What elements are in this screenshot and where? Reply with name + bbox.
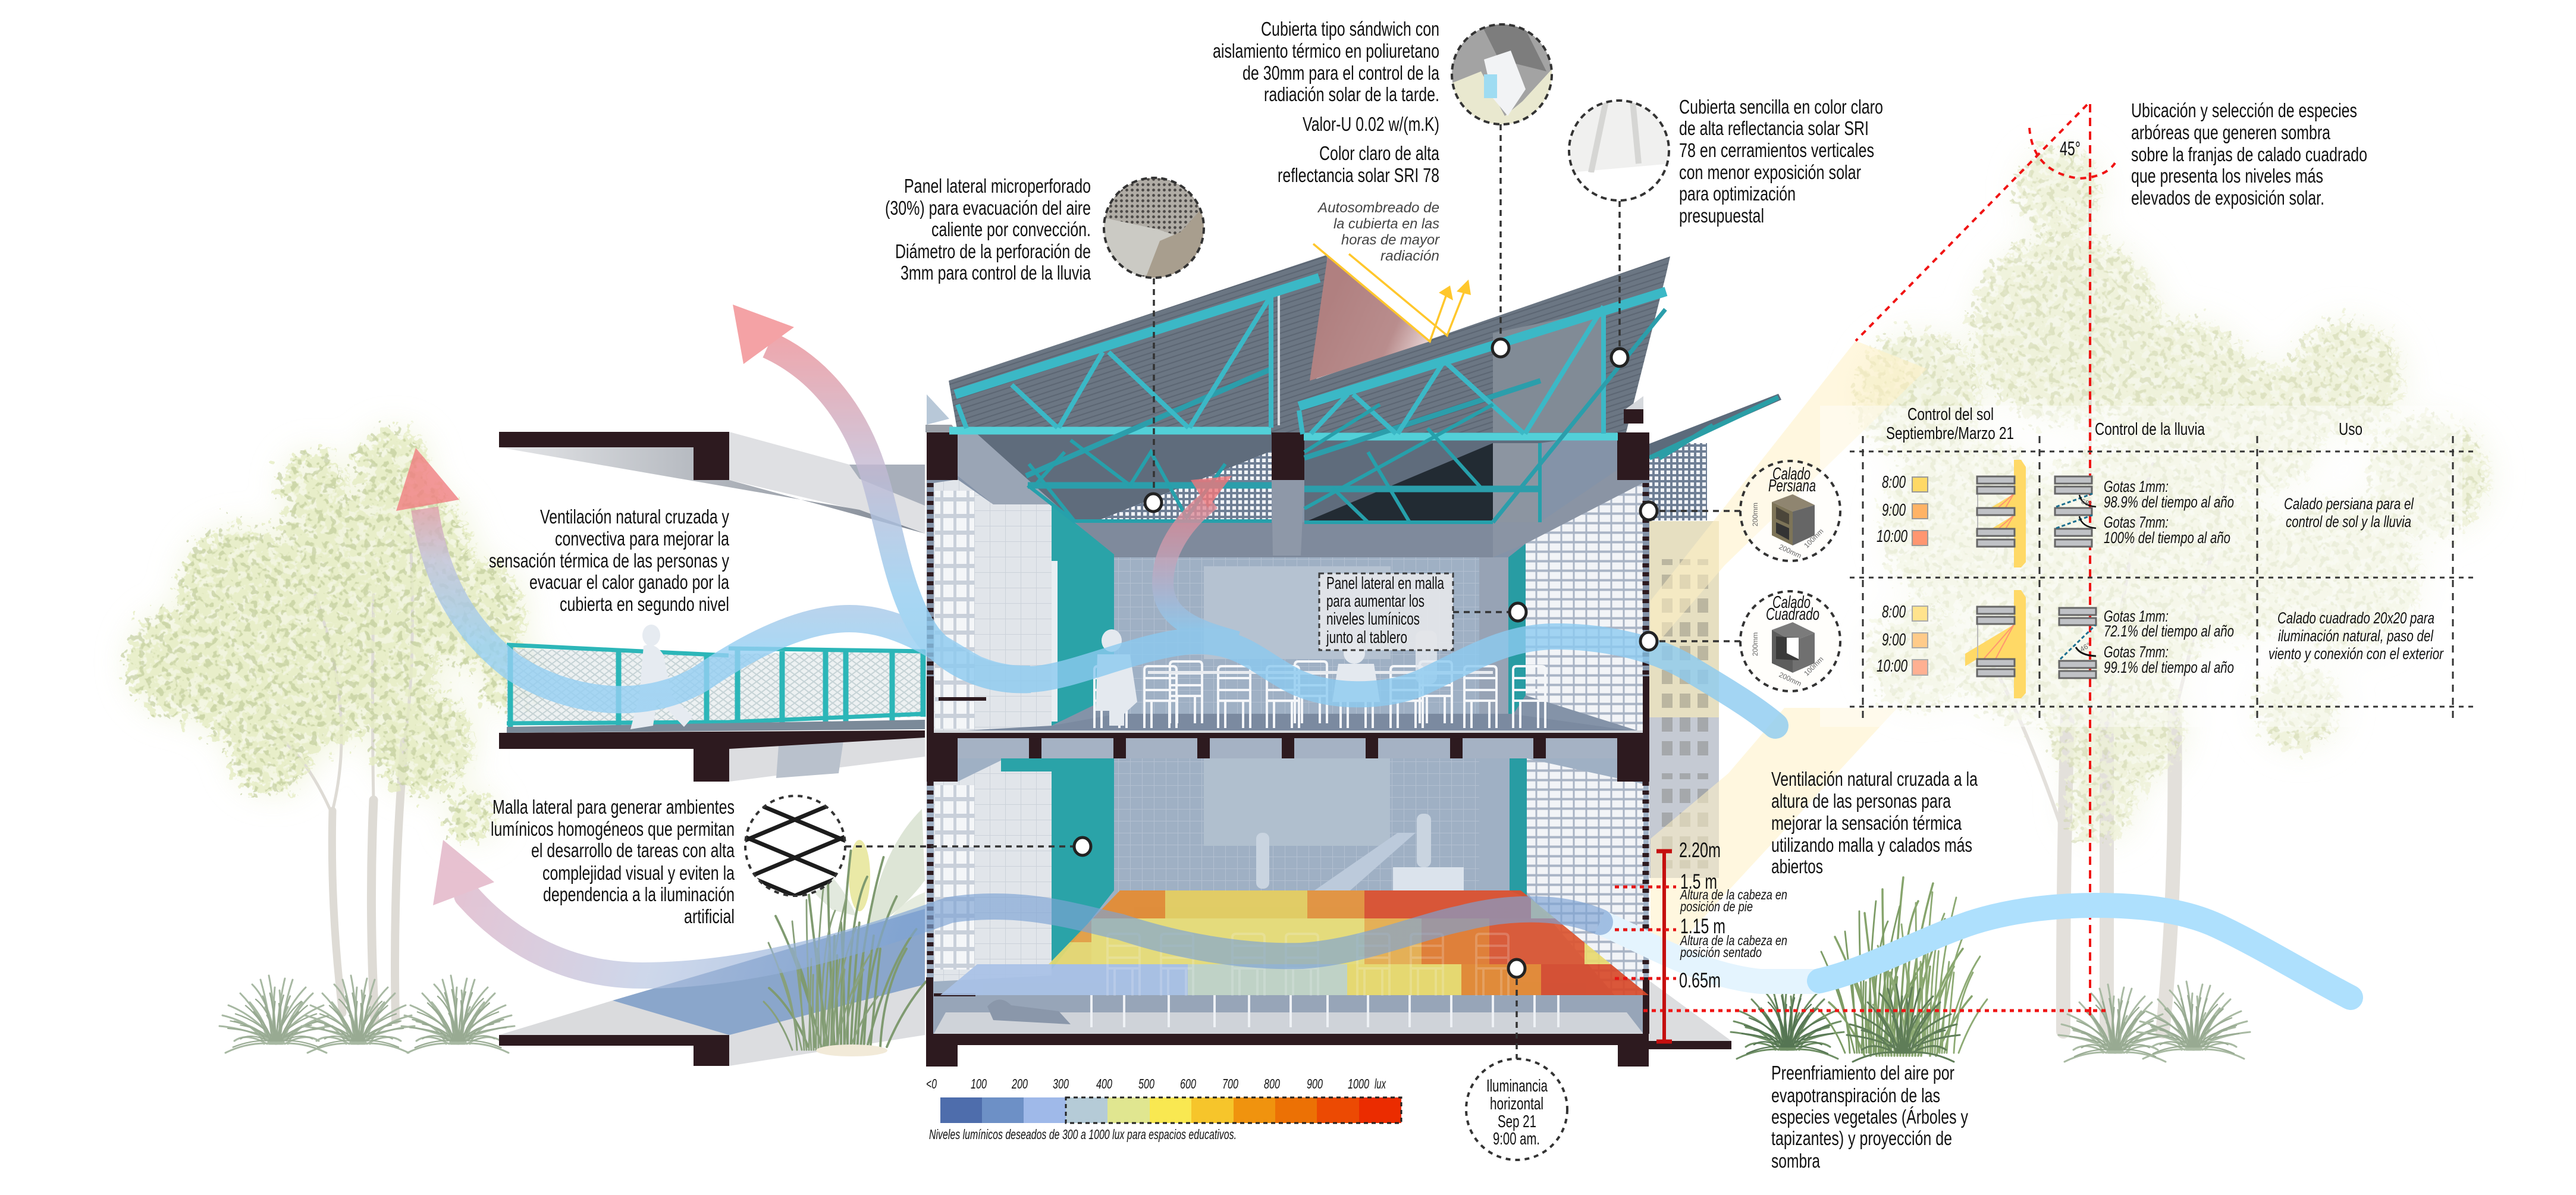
text: self shading note: la cubierta en las	[1334, 216, 1439, 232]
text: sandwich roof	[1213, 18, 1439, 186]
row 2 rain text: 99.1% del tiempo al año	[2104, 658, 2234, 676]
text: light roof: Cubierta sencilla en color claro	[1679, 96, 1883, 118]
callout box: mesh side panel: Panel lateral en malla	[1326, 574, 1445, 593]
table headers: Uso	[2339, 420, 2362, 439]
height scale: 1.15 m	[1680, 915, 1725, 938]
row 1 rain text: Gotas 1mm:	[2104, 478, 2169, 495]
text: self shading note: horas de mayor	[1341, 232, 1440, 248]
callout: calado cuadrado	[1740, 591, 1840, 691]
text: cross ventilation at people height: abiertos	[1771, 855, 1823, 877]
text: microperforated panel: caliente por convección.	[931, 218, 1091, 240]
legend labels: 300	[1053, 1076, 1069, 1092]
row 1 rain diagram	[2055, 476, 2096, 547]
row 2 rain text: Gotas 1mm:	[2104, 607, 2169, 625]
row 2 sun hours	[1877, 603, 1928, 676]
callout: horizontal illuminance	[1466, 1059, 1567, 1160]
text: microperforated panel: 3mm para control de la lluvia	[900, 262, 1091, 284]
marker dots	[1074, 339, 1657, 977]
callout: calado cuadrado: Calado	[1772, 593, 1811, 612]
table headers: Control de la lluvia	[2095, 420, 2205, 439]
text: microperforated panel: (30%) para evacuación del aire	[885, 197, 1091, 219]
text: light roof: para optimización	[1679, 183, 1796, 205]
slab ceiling beams	[958, 738, 1617, 758]
row 2 sun hours: 10:00	[1877, 657, 1907, 676]
text: cross ventilation second level: convectiva para mejorar la	[555, 528, 729, 550]
ground plants	[219, 877, 2250, 1062]
callout box: mesh side panel: para aumentar los	[1326, 592, 1425, 611]
text: self shading note: radiación	[1380, 248, 1439, 264]
row 1 use text: control de sol y la lluvia	[2286, 513, 2411, 531]
text: cross ventilation at people height	[1771, 768, 1978, 877]
row 1 use text	[2284, 495, 2414, 531]
row 1 rain text	[2104, 478, 2234, 547]
text: cross ventilation at people height: Ventilación natural cruzada a la	[1771, 768, 1978, 790]
left tree	[128, 429, 548, 1020]
text: light roof: con menor exposición solar	[1679, 161, 1861, 183]
row 2 use text	[2268, 609, 2444, 663]
text: sandwich roof: radiación solar de la tarde.	[1264, 83, 1439, 105]
text: microperforated panel	[885, 175, 1091, 284]
height scale: 2.20m	[1679, 839, 1721, 862]
text: light roof: presupuestal	[1679, 205, 1764, 227]
solar reflection lines and arrows	[1313, 244, 1471, 341]
row 1 sun diagram	[1977, 460, 2026, 567]
legend labels: 200	[1011, 1076, 1028, 1092]
legend labels: <0	[926, 1076, 937, 1092]
airflow: exterior blue arch	[1819, 905, 2351, 998]
text: cross ventilation second level: Ventilación natural cruzada y	[540, 506, 729, 528]
callout box: mesh side panel: junto al tablero	[1326, 628, 1407, 647]
airflow: pale band leaving building	[1600, 922, 1820, 981]
lower chairs seen through heat map	[1107, 934, 1508, 996]
icon: louver block: 200mm	[1751, 503, 1759, 526]
middle tapered column	[1272, 480, 1304, 556]
text: light roof: 78 en cerramientos verticales	[1679, 139, 1874, 161]
text: self shading note	[1317, 200, 1440, 264]
icon: square block: 200mm	[1751, 632, 1759, 656]
legend labels: 1000	[1348, 1076, 1369, 1092]
height scale: Altura de la cabeza en	[1679, 887, 1787, 902]
row 1 use text: Calado persiana para el	[2284, 495, 2414, 513]
classroom chairs upper floor	[1094, 661, 1545, 728]
legend labels: lux	[1375, 1076, 1386, 1092]
walkway railing	[507, 645, 925, 733]
upper room background	[927, 432, 1649, 742]
icon: square block: 200mm	[1778, 670, 1803, 688]
height scale	[1615, 839, 1787, 1042]
legend labels: 100	[971, 1076, 987, 1092]
text: lateral mesh: dependencia a la iluminación	[543, 883, 735, 905]
text: lateral mesh: complejidad visual y eviten la	[542, 862, 735, 884]
table translucent panel	[1820, 406, 2462, 727]
right tree	[1859, 149, 2491, 1031]
text: pre-cooling: sombra	[1771, 1150, 1820, 1172]
structure	[926, 432, 1649, 1067]
shaded pink wall	[1310, 256, 1430, 381]
row 2 use text: viento y conexión con el exterior	[2268, 645, 2444, 663]
height scale: posición sentado	[1680, 945, 1762, 960]
text: sandwich roof: aislamiento térmico en poliuretano	[1213, 40, 1439, 62]
row 1 sun hours: 10:00	[1877, 527, 1907, 546]
text: sandwich roof: Cubierta tipo sándwich con	[1261, 18, 1439, 40]
row 2 rain text	[2104, 607, 2234, 676]
text: sandwich roof: de 30mm para el control de la	[1242, 62, 1439, 84]
solar beams	[1651, 341, 1927, 959]
icon: square block: 100mm	[1802, 655, 1825, 678]
text: microperforated panel: Panel lateral microperforado	[904, 175, 1091, 197]
callout box: mesh side panel: niveles lumínicos	[1326, 610, 1420, 629]
callout: sandwich roof detail	[1448, 21, 1555, 128]
text: sandwich roof: Valor-U 0.02 w/(m.K)	[1303, 113, 1439, 135]
row 2 use text: iluminación natural, paso del	[2278, 627, 2434, 645]
red shading geometry	[1643, 104, 2115, 1021]
row 2 use text: Calado cuadrado 20x20 para	[2277, 609, 2434, 627]
text: tree location: arbóreas que generen sombra	[2131, 121, 2330, 143]
row 2 rain diagram	[2059, 608, 2096, 678]
icon: louver block	[1751, 494, 1825, 560]
text: light roof	[1679, 96, 1883, 227]
text: pre-cooling: Preenfriamiento del aire por	[1771, 1062, 1954, 1084]
text: tree location: que presenta los niveles más	[2131, 165, 2323, 187]
legend labels: 600	[1180, 1076, 1196, 1092]
row 1 rain text: 98.9% del tiempo al año	[2104, 493, 2234, 511]
text: cross ventilation second level: sensación térmica de las personas y	[489, 550, 729, 572]
row 2 sun hours: 9:00	[1882, 631, 1906, 650]
text: sandwich roof: reflectancia solar SRI 78	[1278, 164, 1439, 186]
icon: louver block: 200mm	[1778, 542, 1803, 560]
text: pre-cooling: tapizantes) y proyección de	[1771, 1127, 1952, 1149]
heat map	[940, 890, 1654, 995]
text: cross ventilation second level	[489, 506, 729, 615]
callout: calado cuadrado: Cuadrado	[1766, 605, 1819, 624]
callout: calado persiana: Persiana	[1768, 476, 1816, 495]
row 1 rain text: 100% del tiempo al año	[2104, 529, 2230, 547]
height scale: posición de pie	[1680, 899, 1753, 914]
lower chair legs over floor	[1091, 995, 1558, 1027]
text: cross ventilation second level: evacuar el calor ganado por la	[529, 571, 729, 593]
text: pre-cooling: especies vegetales (Árboles y	[1771, 1106, 1968, 1128]
text: light roof: de alta reflectancia solar SRI	[1679, 117, 1869, 139]
legend labels	[926, 1076, 1386, 1092]
seated people upper floor	[1096, 629, 1437, 726]
text: self shading note: Autosombreado de	[1317, 200, 1439, 216]
text: tree location: Ubicación y selección de especies	[2131, 99, 2357, 121]
callout: calado persiana	[1740, 461, 1840, 561]
building section	[925, 255, 1670, 1067]
icon: square block	[1751, 622, 1825, 688]
callout: perforated panel detail	[1100, 175, 1207, 283]
text: microperforated panel: Diámetro de la perforación de	[895, 240, 1091, 262]
row 1 sun hours: 9:00	[1882, 501, 1906, 520]
row 1 rain diagram: 68°	[2080, 497, 2093, 509]
row 2 sun diagram	[1965, 590, 2026, 698]
callout: lateral mesh detail	[744, 795, 846, 897]
lower walkway slab	[499, 730, 925, 782]
text: tree location: sobre la franjas de calado cuadrado	[2131, 143, 2367, 165]
table headers: Control del sol	[1907, 405, 1994, 424]
legend color cells	[940, 1097, 1401, 1123]
walking person	[630, 625, 693, 729]
row 1 rain text: Gotas 7mm:	[2104, 513, 2169, 531]
perforated wall edges	[930, 483, 1646, 977]
text: lateral mesh: el desarrollo de tareas con alta	[531, 839, 735, 861]
legend labels: 500	[1138, 1076, 1154, 1092]
icon: louver block: 100mm	[1802, 527, 1825, 550]
steel trusses	[949, 278, 1666, 522]
callout: horizontal illuminance: horizontal	[1490, 1094, 1543, 1114]
leader lines	[845, 124, 1740, 1059]
row 2 rain text: 72.1% del tiempo al año	[2104, 622, 2234, 640]
height scale: Altura de la cabeza en	[1679, 933, 1787, 948]
legend labels: 700	[1222, 1076, 1238, 1092]
airflow: upper floor bands	[396, 305, 1775, 726]
height scale: 1.5 m	[1680, 870, 1717, 893]
text: lateral mesh: artificial	[684, 905, 735, 927]
legend labels: 900	[1307, 1076, 1323, 1092]
text: cross ventilation at people height: mejorar la sensación térmica	[1771, 812, 1962, 834]
legend labels: 800	[1264, 1076, 1280, 1092]
planter near building	[791, 809, 925, 946]
text: cross ventilation second level: cubierta en segundo nivel	[560, 593, 729, 615]
upper walkway slab	[499, 432, 925, 534]
table headers	[1886, 405, 2362, 443]
legend: illuminance scale	[926, 1076, 1401, 1142]
figures lower floor	[1256, 814, 1464, 891]
callout box: mesh side panel	[1319, 573, 1453, 650]
callout: horizontal illuminance: 9:00 am.	[1493, 1130, 1540, 1149]
table headers: Septiembre/Marzo 21	[1886, 424, 2014, 443]
roof undersides	[949, 255, 1670, 432]
height scale: 0.65m	[1679, 969, 1721, 992]
text: pre-cooling	[1771, 1062, 1968, 1172]
eave flashings	[925, 394, 1643, 432]
text: tree location	[2131, 99, 2367, 209]
angle label: 45°	[2060, 137, 2081, 159]
text: pre-cooling: evapotranspiración de las	[1771, 1084, 1940, 1106]
callout: horizontal illuminance: Iluminancia	[1486, 1077, 1548, 1096]
annex right of building	[1649, 394, 1781, 1049]
text: lateral mesh: lumínicos homogéneos que permitan	[491, 818, 735, 840]
callout: light roof detail	[1569, 101, 1671, 202]
ground terrace slab	[499, 851, 926, 1066]
text: lateral mesh: Malla lateral para generar ambientes	[492, 796, 735, 818]
text: cross ventilation at people height: altura de las personas para	[1771, 790, 1951, 812]
lower room background	[927, 758, 1649, 1035]
callout: calado persiana: Calado	[1772, 465, 1811, 484]
legend caption: Niveles lumínicos deseados de 300 a 1000 lux para espacios educativos.	[929, 1127, 1237, 1142]
row 2 rain text: Gotas 7mm:	[2104, 643, 2169, 661]
row 1 sun hours: 8:00	[1882, 473, 1906, 492]
row 1 sun hours	[1877, 473, 1928, 546]
text: lateral mesh	[491, 796, 735, 927]
table grid	[1850, 436, 2473, 719]
text: cross ventilation at people height: utilizando malla y calados más	[1771, 834, 1972, 856]
row 2 sun hours: 8:00	[1882, 603, 1906, 622]
airflow: lower floor band	[433, 840, 1600, 976]
text: tree location: elevados de exposición solar.	[2131, 187, 2324, 209]
text: sandwich roof: Color claro de alta	[1319, 142, 1439, 164]
row 2 rain diagram: 46°	[2078, 641, 2092, 654]
callout: horizontal illuminance: Sep 21	[1498, 1112, 1536, 1131]
legend labels: 400	[1096, 1076, 1112, 1092]
